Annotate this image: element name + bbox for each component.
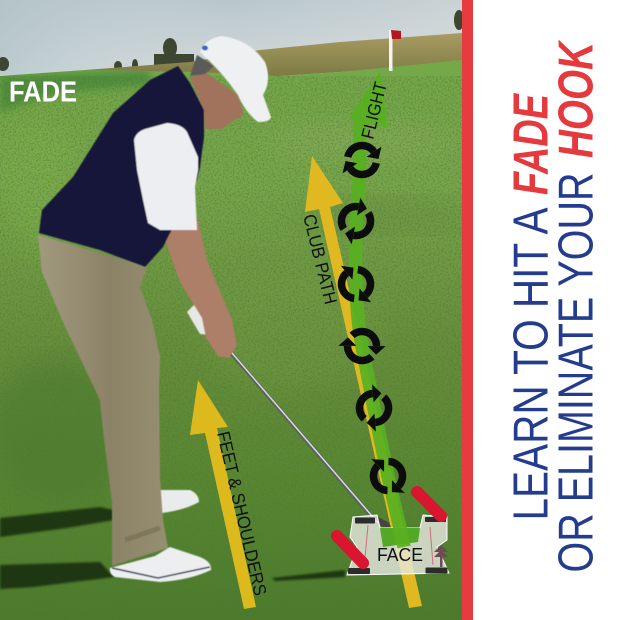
red alignment tube right [417,492,441,516]
photo background: golf course [0,0,470,620]
neck and face [190,72,243,129]
right white panel [473,0,620,620]
vertical headline [504,39,604,573]
tan hillside [85,33,462,76]
gloved hand grip [187,305,209,335]
green face rectangle [380,528,420,547]
vest [39,66,204,267]
hair [190,55,214,76]
trees on horizon [0,10,464,71]
back shoe [160,490,199,513]
spin icon 2 [332,197,380,245]
black pads [348,517,448,574]
yellow arrow: club path [305,156,422,608]
spin icon 3 [340,263,372,305]
yellow arrow: feet and shoulders [190,380,256,609]
white shirt sleeve [134,123,198,230]
spin icon 1 [342,145,382,175]
forearm and hand [162,220,237,358]
headline line 2: HOOK [548,39,604,158]
fairway turf [0,60,462,620]
ground shadows [0,507,345,589]
golf club [232,353,391,527]
club head [374,515,391,527]
golfer [38,36,271,582]
speed trap base [347,515,449,575]
spin icon 5 [352,384,396,432]
green arrow: flight [349,72,404,547]
red divider bar [462,0,473,620]
front shoe [110,547,211,582]
headline line 1: FADE [504,92,558,195]
spin icon 4 [338,323,386,369]
FACE label: FACE [377,545,423,565]
red alignment tube left [337,536,363,563]
arrow logo [434,545,448,557]
headline line 1: LEARN TO HIT A [504,208,558,520]
FADE title: FADE [9,76,77,108]
FLIGHT label: FLIGHT [357,80,391,141]
white cap [200,36,271,122]
trousers [38,235,168,566]
headline line 2: OR ELIMINATE YOUR [548,172,604,572]
FEET AND SHOULDERS label: FEET & SHOULDERS [213,429,270,598]
spin icon 6 [370,454,406,498]
spin icons [332,145,406,498]
flag [389,30,401,71]
turf shading [0,70,470,620]
CLUB PATH label: CLUB PATH [299,212,341,306]
